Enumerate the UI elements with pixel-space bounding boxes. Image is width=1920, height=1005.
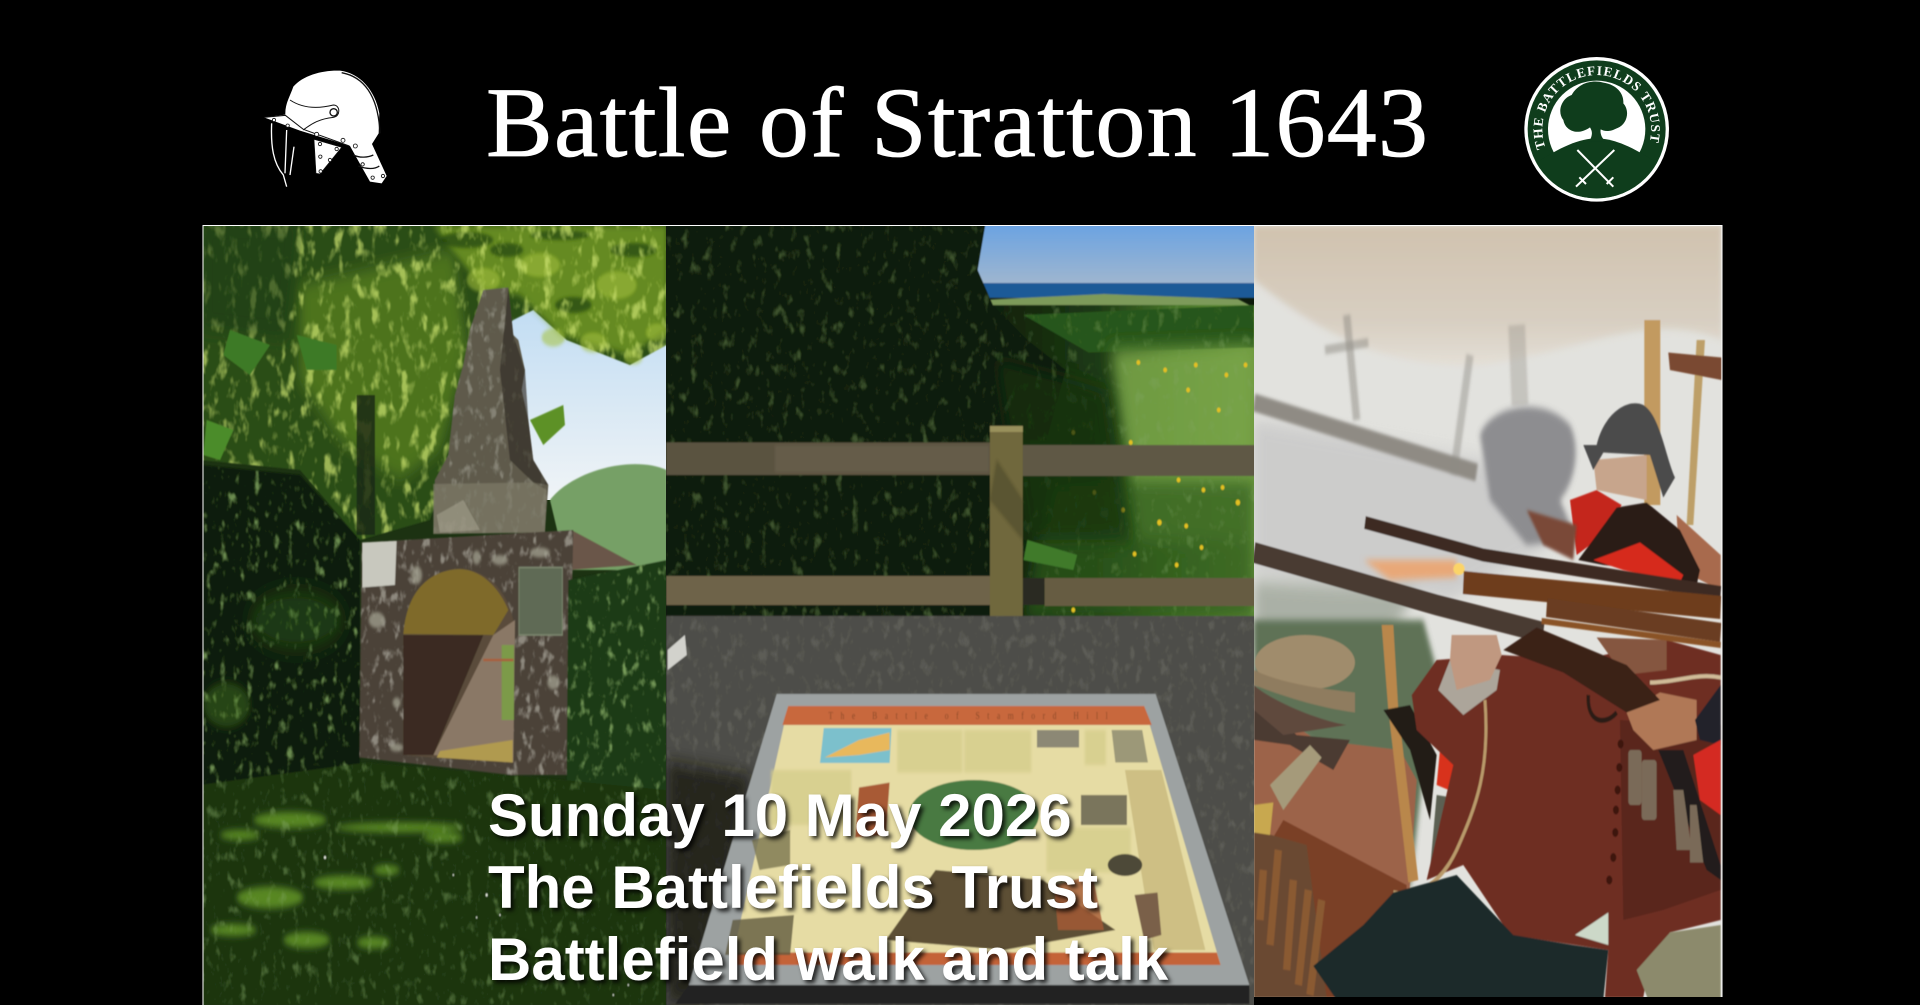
logo: The Battlefields Trust: THE BATTLEFIELDS TRUST [1533, 66, 1660, 150]
arch opening [403, 569, 515, 762]
coastal land [990, 292, 1250, 306]
board title band [782, 706, 1152, 725]
left soldier with flat cap [1254, 635, 1417, 998]
distant tree at right [550, 464, 667, 570]
maroon coat [1412, 638, 1721, 998]
panel: fence and interpretation board photo [666, 225, 1257, 1005]
logo: The Battlefields Trust [1524, 57, 1669, 202]
bandolier charges left [1260, 850, 1322, 995]
pike shafts [1644, 320, 1722, 525]
musket stock [1503, 628, 1660, 712]
stone plinth [666, 616, 1255, 1005]
interpretation board [675, 694, 1249, 1004]
red and black sash [1527, 490, 1700, 585]
board text columns [771, 730, 1131, 872]
sky behind the monument [510, 270, 666, 500]
board side column [1125, 770, 1205, 950]
lower left shrubbery [200, 465, 360, 785]
dark hedge [666, 225, 1131, 620]
wooden fence [666, 426, 1255, 617]
muzzle flash [1363, 560, 1465, 580]
background landscape [1254, 620, 1437, 890]
grass lawn [200, 762, 667, 1005]
pike and red cloth mid [1382, 625, 1477, 882]
smoke plume [1254, 225, 1722, 365]
match cord [1393, 700, 1486, 894]
pale breeches [1637, 925, 1721, 1000]
bronze plaque [519, 568, 562, 635]
title: Battle of Stratton 1643 [486, 67, 1428, 178]
organiser line: The Battlefields Trust [488, 854, 1098, 921]
ghost pikes and barrel [1254, 315, 1520, 475]
board title text: The Battle of Stamford Hill [828, 710, 1108, 721]
soldier with morion helmet [1583, 403, 1721, 590]
shrubbery right of gate [567, 560, 667, 790]
panel: musketeers firing photo [1254, 225, 1722, 1000]
shirt cuff and hands [1438, 635, 1721, 815]
event text overlay [488, 782, 1169, 993]
event type line: Battlefield walk and talk [488, 926, 1169, 993]
panel: monument photo [200, 220, 667, 1005]
monument spire [433, 288, 548, 534]
icon: civil war lobster-tail helmet [264, 71, 387, 187]
grey smoke [1254, 420, 1550, 650]
battlefield map [909, 780, 1039, 850]
sea [966, 283, 1257, 298]
tree canopy [200, 220, 667, 540]
sky [966, 225, 1257, 284]
cannon scene [886, 870, 1115, 950]
sunlit field and hedge [992, 304, 1254, 617]
illustrated figures [1081, 795, 1127, 825]
locator map [820, 728, 892, 763]
musket barrels [1254, 522, 1721, 645]
powder charges [1628, 750, 1721, 880]
board pictures [1037, 730, 1079, 748]
gateway wall [359, 530, 637, 775]
thin white photo border [203, 226, 1722, 1005]
pale shirt tail [1575, 912, 1608, 945]
date line: Sunday 10 May 2026 [488, 782, 1072, 849]
figure in smoke [1480, 407, 1577, 545]
dark trousers [1313, 875, 1608, 1000]
